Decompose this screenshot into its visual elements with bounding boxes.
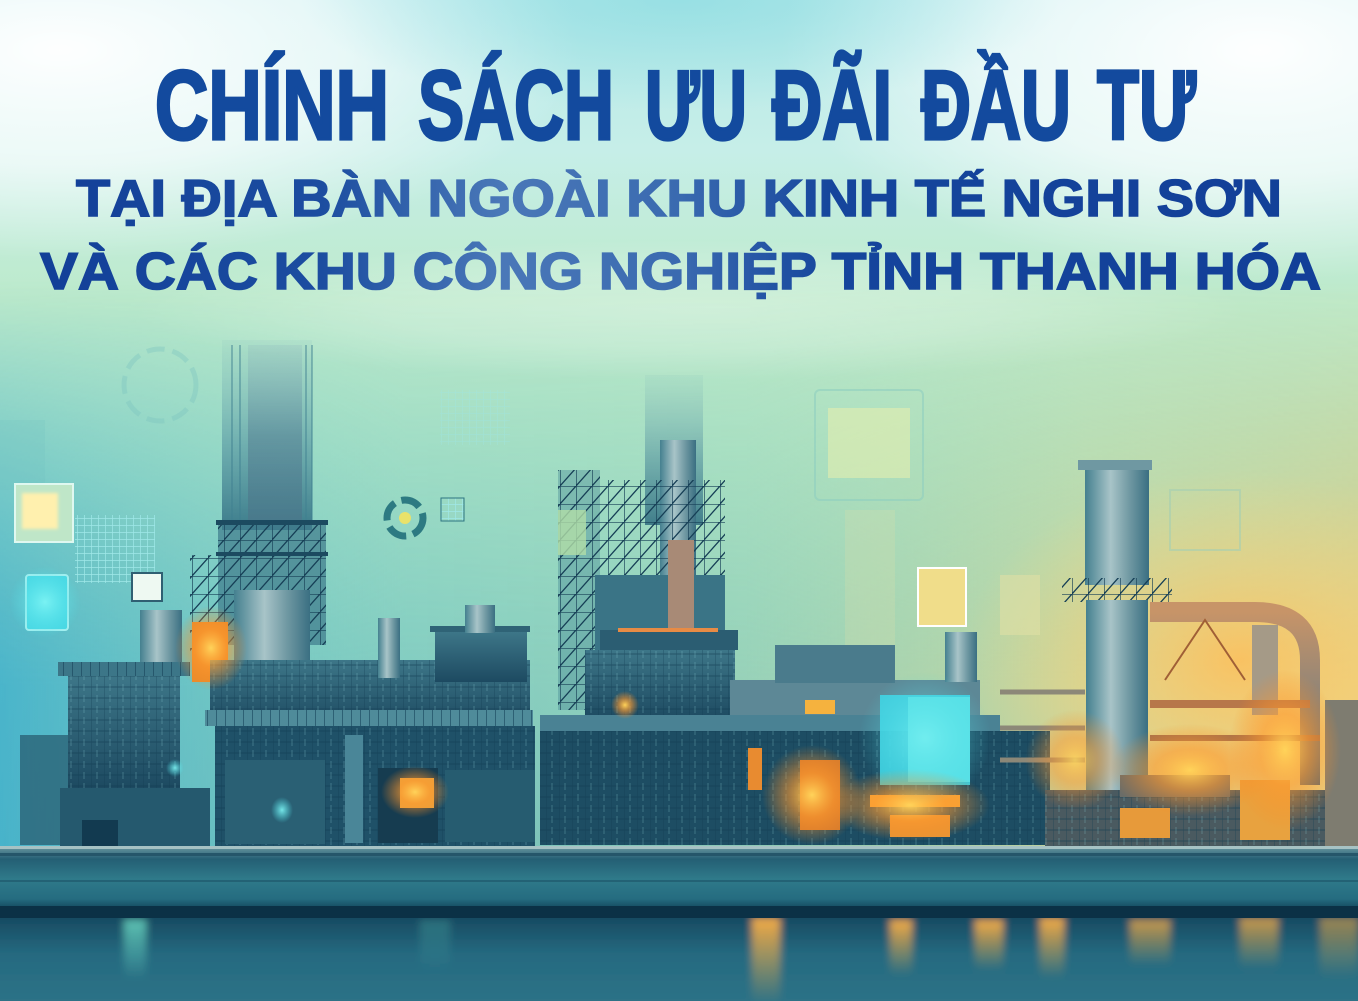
heading line 1: ĐẦU xyxy=(921,50,1071,160)
faded digital panels in the sky xyxy=(0,349,1240,660)
right column and arched pipe xyxy=(1000,460,1358,846)
heading line 1: SÁCH xyxy=(418,50,614,160)
heading line 1: TƯ xyxy=(1097,50,1196,160)
left hologram panels xyxy=(15,484,966,630)
central-right plant xyxy=(540,632,1050,845)
lights xyxy=(9,566,1341,845)
title xyxy=(40,50,1321,301)
left small tower and block xyxy=(20,610,228,846)
water reflection xyxy=(0,905,1358,1001)
central tall column xyxy=(558,375,738,720)
central-left plant xyxy=(205,605,535,846)
heading line 1 xyxy=(155,50,1196,160)
heading line 1: ĐÃI xyxy=(772,50,892,160)
heading line 2: TẠI ĐỊA BÀN NGOÀI KHU KINH TẾ NGHI SƠN xyxy=(76,169,1282,228)
heading line 1: ƯU xyxy=(645,50,747,160)
main chimney tower xyxy=(190,340,328,660)
heading line 1: CHÍNH xyxy=(155,50,389,160)
heading line 3: VÀ CÁC KHU CÔNG NGHIỆP TỈNH THANH HÓA xyxy=(40,242,1321,301)
quay and walkway xyxy=(0,846,1358,918)
